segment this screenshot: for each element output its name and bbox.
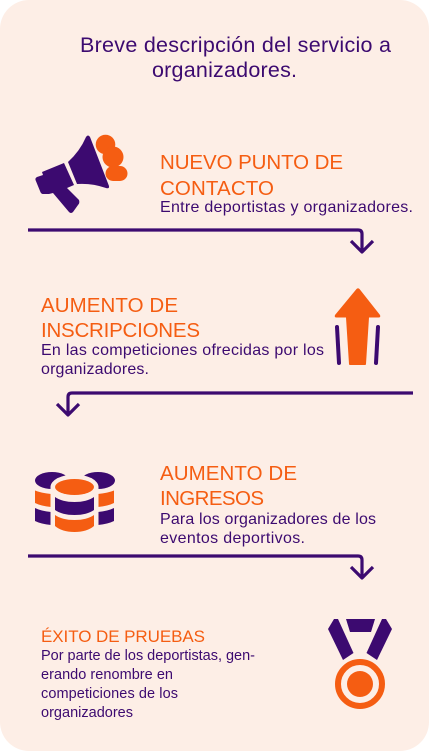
arrow: to step 3 (57, 393, 413, 415)
heading: exito de pruebas: ÉXITO DE PRUEBAS (41, 627, 205, 646)
icon: megaphone (35, 135, 128, 213)
heading: aumento de inscripciones: INSCRIPCIONES (41, 319, 200, 342)
text: por parte de los deportistas: organizadores (41, 705, 133, 721)
text: por parte de los deportistas: competiciones de los (41, 686, 178, 702)
text: por parte de los deportistas (41, 648, 255, 721)
text: por parte de los deportistas: erando renombre en (41, 667, 173, 683)
text: entre deportistas y organizadores: Entre deportistas y organizadores. (160, 199, 413, 216)
title (80, 33, 391, 82)
heading: nuevo punto de contacto (160, 151, 343, 200)
title: organizadores. (152, 58, 297, 82)
heading: aumento de ingresos: INGRESOS (160, 487, 264, 510)
heading: aumento de ingresos (160, 462, 297, 510)
heading: aumento de ingresos: AUMENTO DE (160, 462, 297, 485)
text: para los organizadores: eventos deportivos. (160, 530, 305, 547)
text: por parte de los deportistas: Por parte de los deportistas, gen- (41, 648, 255, 664)
heading: aumento de inscripciones (41, 294, 200, 342)
arrow: to step 4 (28, 556, 373, 578)
heading: nuevo punto de contacto: NUEVO PUNTO DE (160, 151, 343, 174)
icon: database stacks (35, 472, 115, 532)
text: en las competiciones (41, 342, 324, 378)
text: en las competiciones: En las competiciones ofrecidas por los (41, 342, 324, 359)
icon: medal (328, 619, 392, 706)
text: para los organizadores: Para los organizadores de los (160, 511, 376, 528)
text: para los organizadores (160, 511, 376, 547)
text: en las competiciones: organizadores. (41, 361, 149, 378)
heading: aumento de inscripciones: AUMENTO DE (41, 294, 178, 317)
title: Breve descripción del servicio a (80, 33, 391, 57)
arrow: to step 2 (28, 230, 373, 252)
icon: up arrow (335, 288, 380, 365)
heading: nuevo punto de contacto: CONTACTO (160, 177, 274, 200)
